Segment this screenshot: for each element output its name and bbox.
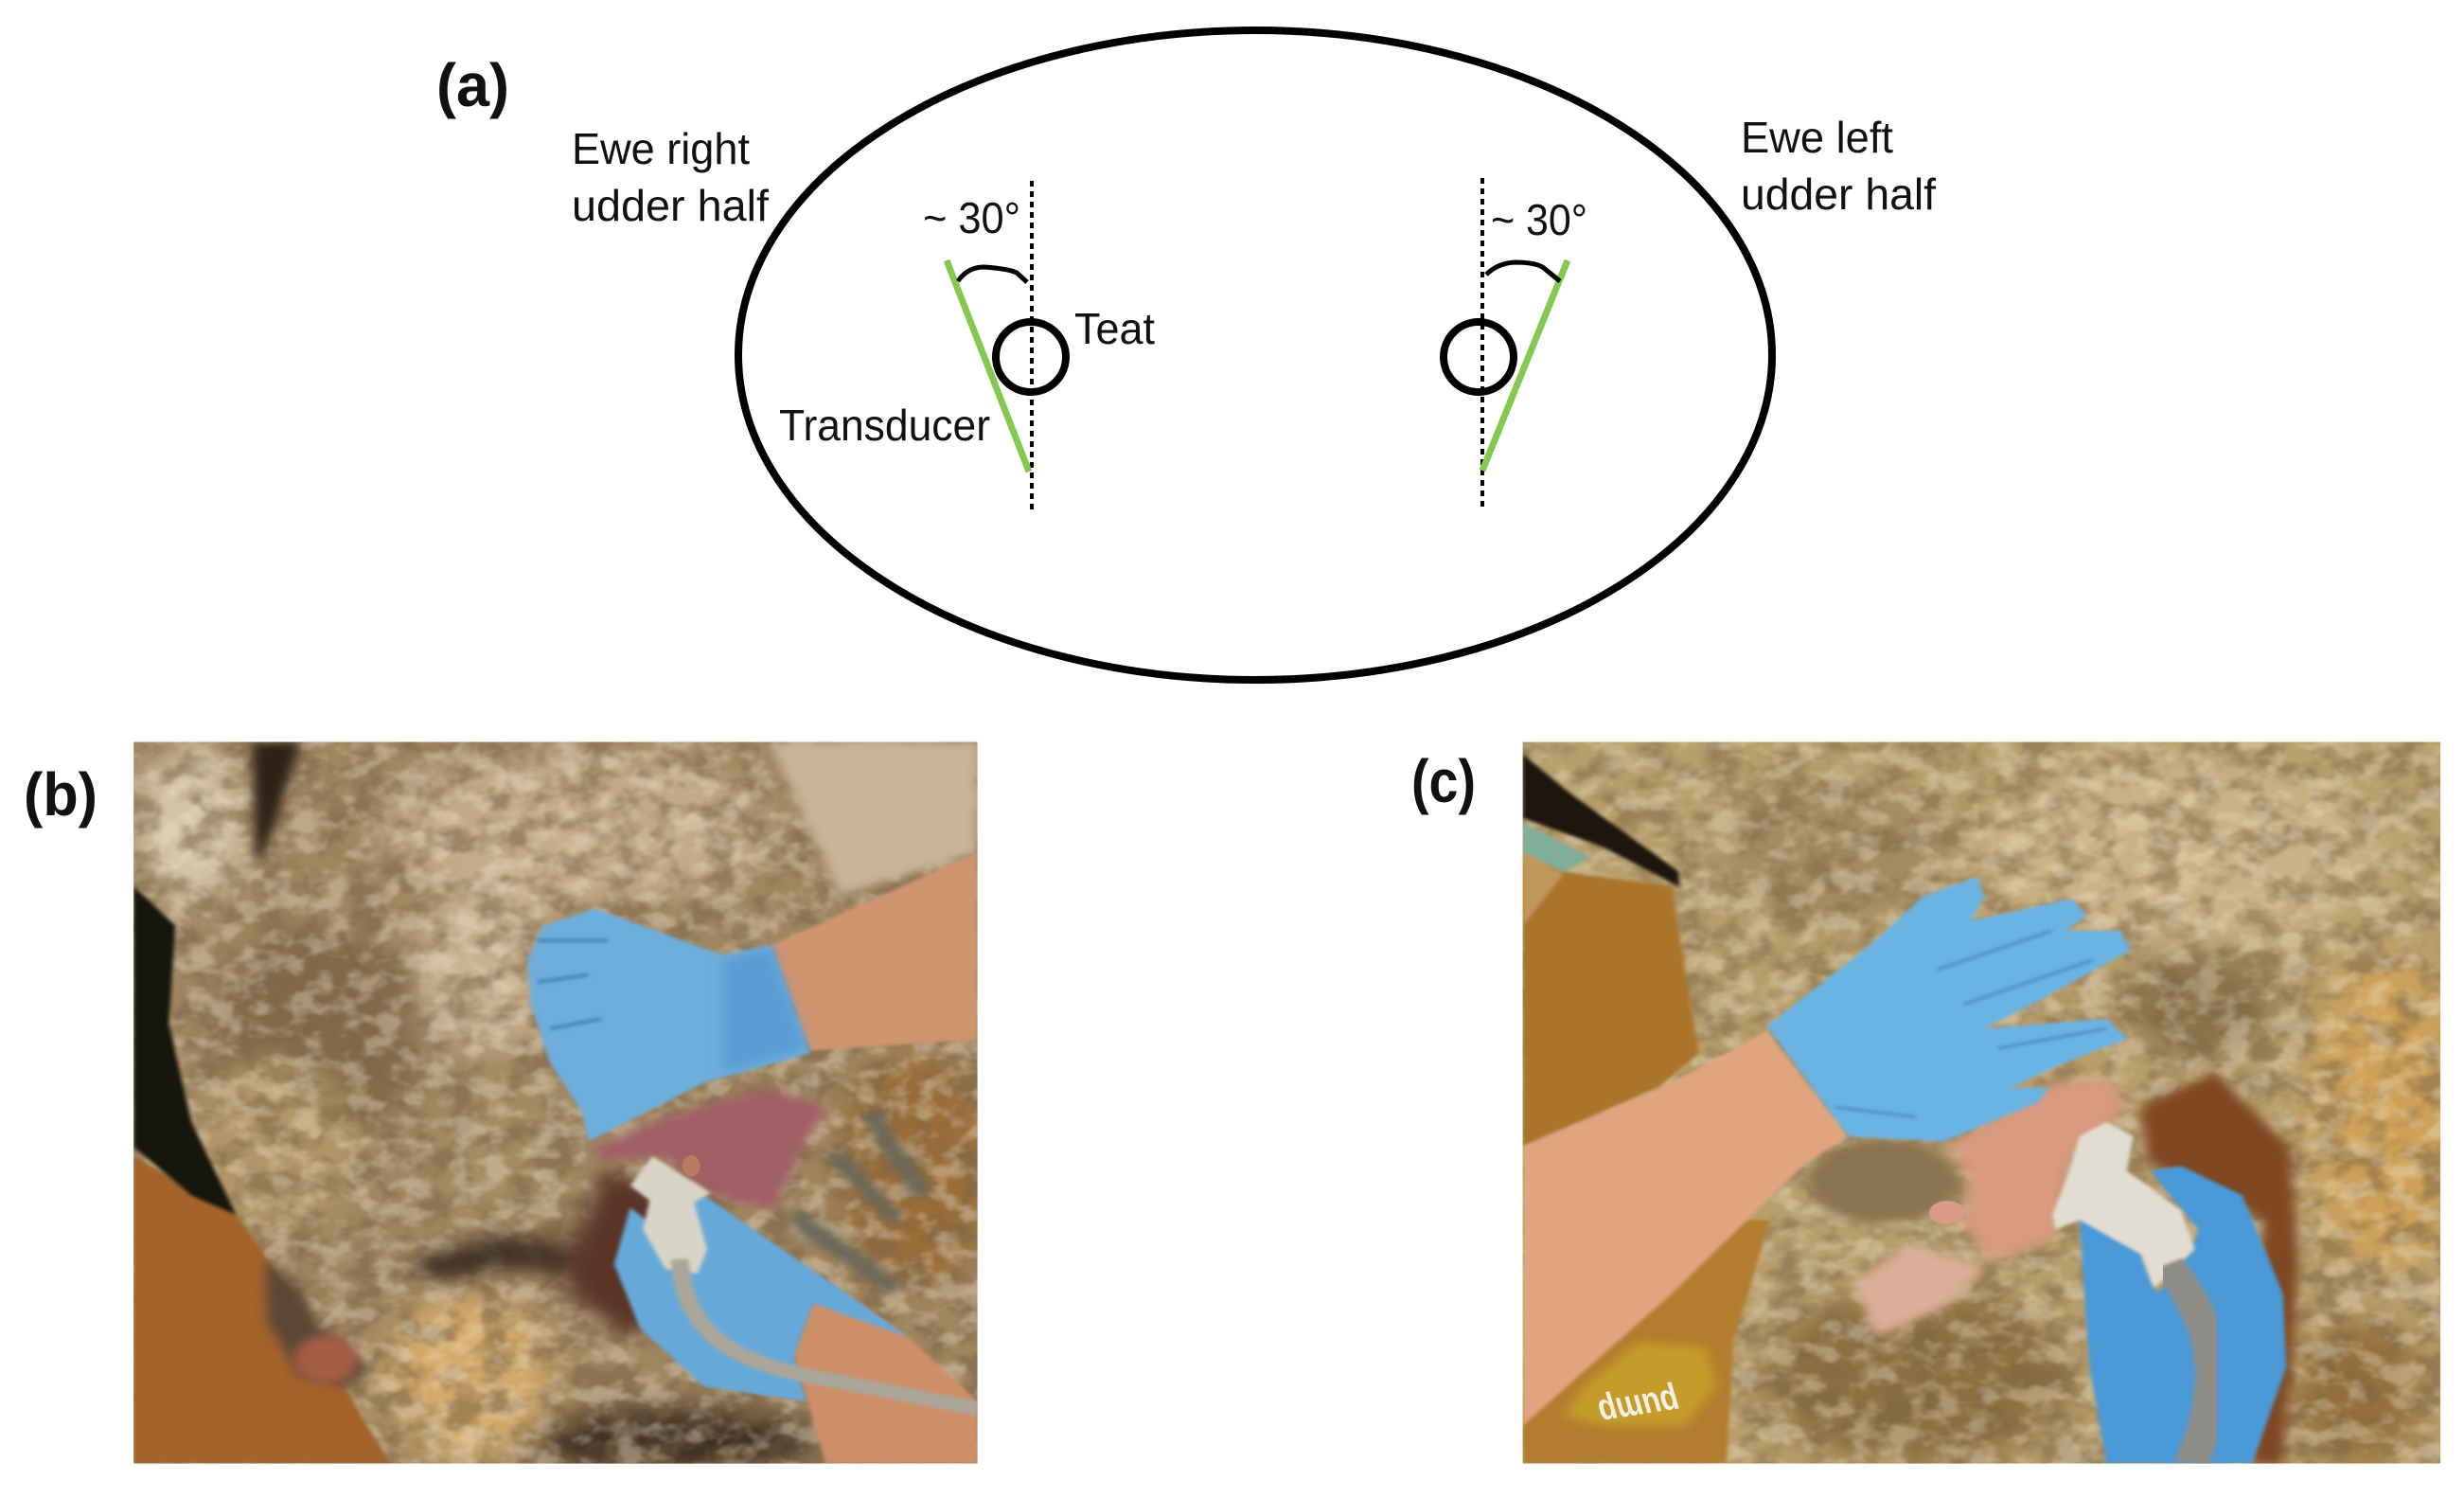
teal box — [1523, 823, 1590, 872]
wool clump beneath arm — [1808, 1139, 1958, 1222]
cleaner bottle — [1564, 1343, 1716, 1434]
wool patches — [133, 749, 992, 1475]
label: ewe left udder half: udder half — [1741, 169, 1936, 219]
wooden floor, upper right — [768, 742, 978, 897]
angle arc, ewe left — [1486, 262, 1560, 281]
angle arc, ewe right — [958, 267, 1027, 282]
dark matted wool, right — [793, 1112, 922, 1289]
label: panel c: (c) — [1411, 747, 1476, 815]
label: panel b: (b) — [24, 760, 97, 829]
wool texture — [1523, 742, 2440, 1464]
photo b: scanning the ewe right udder half — [133, 742, 992, 1475]
transducer line, ewe left — [1482, 260, 1568, 471]
udder skin — [589, 1088, 825, 1210]
teat — [682, 1155, 700, 1177]
glove, lower hand — [2080, 1166, 2286, 1464]
label: ewe left udder half: Ewe left — [1741, 113, 1893, 162]
glove, upper hand — [1767, 877, 2130, 1141]
probe cable — [680, 1259, 978, 1409]
udder skin — [1950, 1078, 2127, 1261]
teat circle, ewe left — [1444, 322, 1514, 392]
udder outline ellipse — [738, 30, 1772, 680]
floor, lower left — [1523, 1220, 1770, 1464]
transducer line, ewe right — [947, 260, 1029, 472]
glove, lower hand — [614, 1195, 909, 1401]
probe cable — [2168, 1264, 2212, 1464]
ultrasound probe — [2052, 1122, 2195, 1289]
label: ewe right udder half: udder half — [572, 181, 769, 230]
label: ewe right udder half: Ewe right — [572, 124, 750, 173]
panel a: udder diagram — [436, 30, 1936, 680]
label: panel a: (a) — [436, 51, 509, 119]
label: ewe right udder half — [572, 124, 769, 230]
wool patches — [1720, 759, 2459, 1465]
arm, lower — [793, 1303, 978, 1464]
left half assembly — [1444, 178, 1587, 511]
wool texture — [133, 742, 978, 1464]
dark pen edge — [133, 886, 236, 1215]
right half assembly — [779, 181, 1155, 513]
label: 30 degrees, ewe right: ~ 30° — [923, 193, 1020, 242]
teat — [1929, 1201, 1964, 1224]
label: transducer: Transducer — [779, 401, 990, 450]
arm — [1523, 1031, 1849, 1426]
wooden floor, lower left — [133, 1156, 390, 1464]
ewe leg — [265, 1259, 371, 1386]
label: ewe left udder half — [1741, 113, 1936, 219]
cavity between wool — [2140, 1073, 2300, 1464]
arm, upper — [771, 852, 978, 1051]
label: teat: Teat — [1074, 304, 1155, 353]
ultrasound probe — [630, 1156, 710, 1274]
photo c: scanning the ewe left udder half — [1523, 742, 2459, 1465]
cleaner bottle: pump — [1593, 1381, 1685, 1434]
teat circle, ewe right — [996, 322, 1066, 392]
floor, left side — [1523, 867, 1699, 1147]
label: 30 degrees, ewe left: ~ 30° — [1491, 195, 1587, 244]
dark pen edge — [1523, 754, 1679, 886]
glove, upper hand — [527, 909, 809, 1141]
